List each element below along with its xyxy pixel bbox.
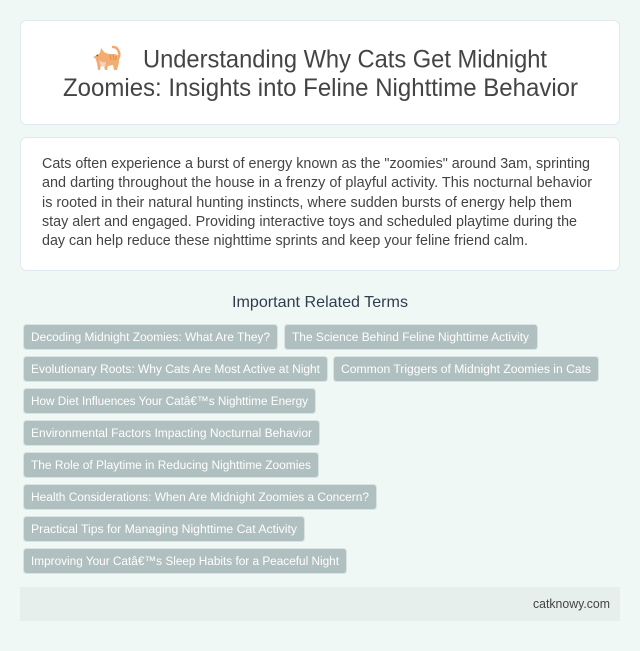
tag: Improving Your Catâ€™s Sleep Habits for a Peaceful Night — [31, 554, 340, 568]
tag — [24, 452, 318, 478]
tag — [24, 548, 346, 574]
summary text: and darting throughout the house in a frenzy of playful activity. This nocturnal behavior — [42, 175, 592, 191]
title: Zoomies: Insights into Feline Nighttime Behavior — [63, 74, 578, 102]
tag — [24, 324, 278, 350]
tag: How Diet Influences Your Catâ€™s Nighttime Energy — [31, 394, 309, 408]
summary text: stay alert and engaged. Providing interactive toys and scheduled playtime during the — [42, 214, 577, 230]
summary text: is rooted in their natural hunting instincts, where sudden bursts of energy help them — [42, 195, 572, 211]
tag: Evolutionary Roots: Why Cats Are Most Active at Night — [31, 362, 321, 376]
tag — [284, 324, 538, 350]
title — [63, 46, 578, 102]
tag: The Science Behind Feline Nighttime Activity — [292, 330, 530, 344]
title: Understanding Why Cats Get Midnight — [143, 46, 547, 74]
tag: Decoding Midnight Zoomies: What Are They? — [31, 330, 270, 344]
summary text: Cats often experience a burst of energy known as the "zoomies" around 3am, sprinting — [42, 156, 590, 172]
summary text — [42, 156, 592, 249]
tags — [24, 324, 598, 574]
tag — [24, 356, 328, 382]
tag — [24, 388, 316, 414]
tag: Common Triggers of Midnight Zoomies in Cats — [341, 362, 591, 376]
heading: related terms: Important Related Terms — [232, 294, 408, 311]
panel: title card — [20, 20, 620, 124]
tag — [24, 420, 320, 446]
tag: Health Considerations: When Are Midnight Zoomies a Concern? — [31, 490, 369, 504]
icon: cat — [93, 47, 119, 70]
tag: Environmental Factors Impacting Nocturnal Behavior — [31, 426, 312, 440]
footer: catknowy.com — [533, 596, 610, 611]
summary text: day can help reduce these nighttime sprints and keep your feline friend calm. — [42, 233, 528, 249]
tag: The Role of Playtime in Reducing Nighttime Zoomies — [31, 458, 311, 472]
tag — [24, 484, 376, 510]
tag: Practical Tips for Managing Nighttime Cat Activity — [31, 522, 298, 536]
tag — [24, 516, 304, 542]
tag — [334, 356, 598, 382]
panel: summary — [20, 138, 620, 270]
footer — [20, 587, 620, 621]
